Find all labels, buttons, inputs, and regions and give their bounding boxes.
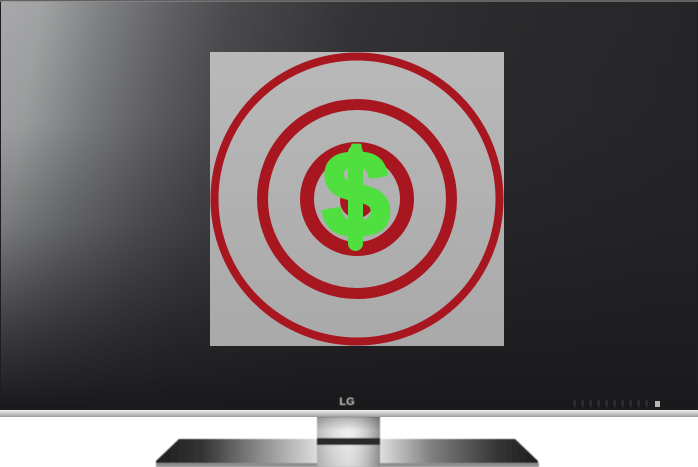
- target bullseye: [340, 184, 374, 218]
- lower bezel strip: [0, 410, 698, 417]
- stand base: [156, 439, 539, 467]
- target middle ring: [262, 104, 452, 294]
- logo: LG: [339, 396, 355, 408]
- panel: target image: [210, 52, 504, 346]
- icon: dollar sign: $: [322, 126, 390, 262]
- power button: [655, 401, 660, 407]
- target outer ring: [214, 56, 500, 342]
- target inner ring: [307, 149, 407, 249]
- stand neck: [317, 415, 380, 467]
- control buttons: [574, 400, 648, 407]
